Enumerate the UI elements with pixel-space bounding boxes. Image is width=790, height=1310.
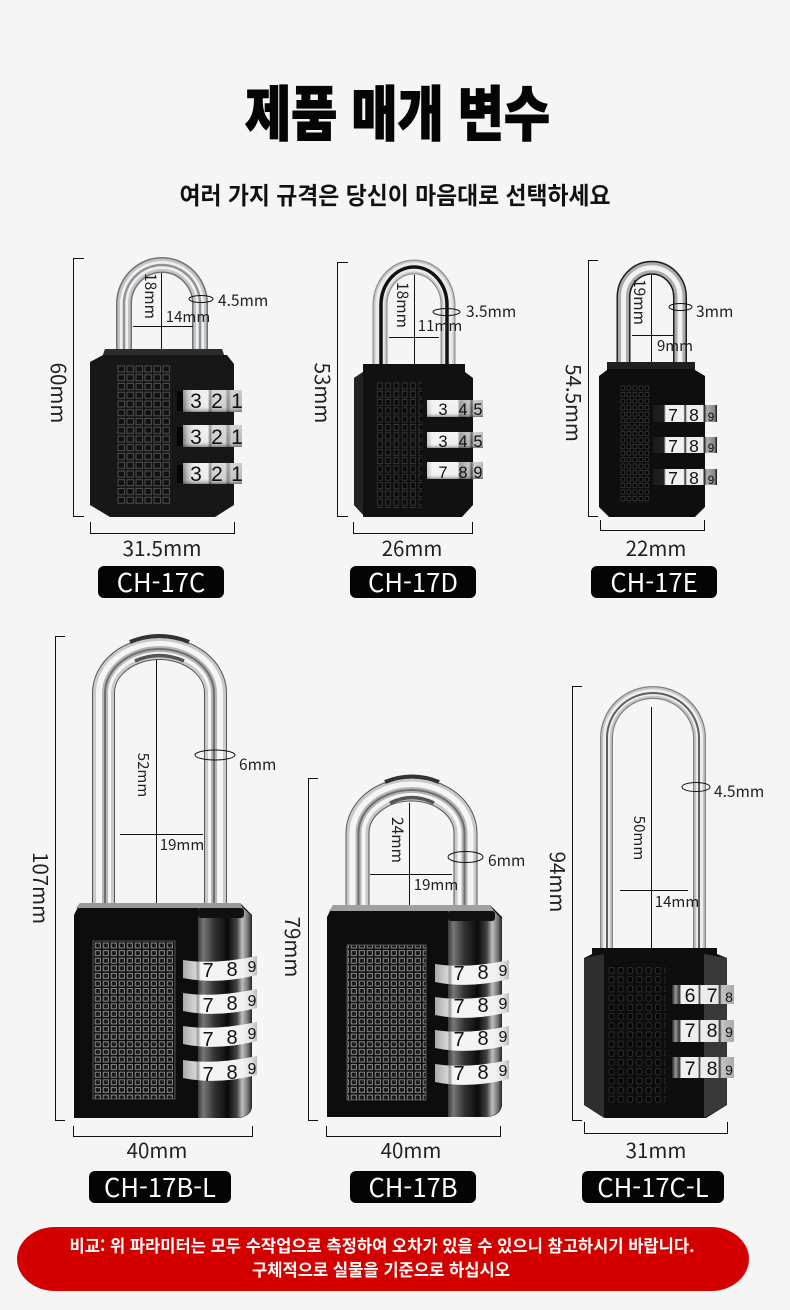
thickness label: 3mm [696, 300, 733, 322]
combination wheels: 9 [499, 1063, 508, 1080]
combination wheels: 3 [438, 433, 448, 451]
combination wheels: 8 [477, 1062, 489, 1084]
note line 2: 구체적으로 실물을 기준으로 하십시오 [252, 1256, 510, 1281]
combination wheels: 2 [211, 390, 223, 413]
height label: 53mm [309, 363, 339, 423]
inner width label: 19mm [160, 834, 204, 855]
subtitle: 여러 가지 규격은 당신이 마음대로 선택하세요 [180, 176, 610, 211]
combination wheels: 8 [707, 1020, 717, 1042]
height label: 94mm [544, 852, 574, 912]
thickness label: 6mm [239, 753, 276, 775]
combination wheels: 1 [231, 390, 243, 413]
combination wheels [435, 960, 509, 1085]
inner width label: 19mm [414, 874, 458, 895]
width label: 31mm [626, 1134, 686, 1164]
dimension lines [308, 778, 500, 1136]
combination wheels: 8 [707, 1058, 717, 1080]
inner height label: 19mm [629, 279, 651, 325]
model tag [591, 563, 717, 600]
combination wheels: 3 [190, 390, 202, 413]
width label: 40mm [381, 1134, 441, 1164]
shackle [624, 268, 680, 366]
inner width label: 9mm [657, 335, 693, 356]
combination wheels: 1 [231, 426, 243, 449]
combination wheels: 7 [668, 405, 678, 425]
thickness label: 4.5mm [218, 289, 268, 311]
inner height label: 18mm [140, 273, 162, 319]
padlock spec: CH-17C [45, 258, 268, 600]
padlock spec: CH-17D [309, 262, 516, 600]
combination wheels: 8 [725, 989, 733, 1005]
padlock spec: CH-17C-L [544, 686, 764, 1205]
model tag: CH-17C-L [597, 1168, 709, 1205]
combination wheels: 5 [473, 433, 483, 451]
combination wheels: 7 [668, 436, 678, 456]
combination wheels [177, 390, 243, 486]
width label: 31.5mm [123, 532, 201, 562]
dimension lines [338, 262, 472, 534]
combination wheels: 9 [248, 993, 257, 1010]
combination wheels [427, 400, 483, 482]
height label: 107mm [27, 852, 57, 924]
combination wheels: 8 [226, 1027, 238, 1049]
combination wheels: 8 [689, 436, 699, 456]
combination wheels: 9 [248, 959, 257, 976]
inner width label: 14mm [655, 891, 699, 912]
combination wheels: 7 [453, 963, 465, 985]
combination wheels [653, 405, 717, 488]
dimension lines [74, 258, 234, 534]
inner height label: 24mm [387, 817, 409, 863]
combination wheels: 8 [477, 962, 489, 984]
combination wheels: 7 [202, 1029, 214, 1051]
combination wheels: 4 [458, 401, 468, 419]
combination wheels: 9 [708, 473, 715, 487]
combination wheels: 8 [226, 959, 238, 981]
combination wheels: 9 [499, 963, 508, 980]
shackle [380, 267, 448, 368]
model tag: CH-17B-L [104, 1168, 216, 1205]
combination wheels [672, 985, 734, 1080]
combination wheels: 7 [685, 1058, 695, 1080]
combination wheels: 9 [248, 1061, 257, 1078]
padlock spec: CH-17B-L [27, 636, 276, 1205]
combination wheels: 7 [202, 960, 214, 982]
combination wheels: 8 [689, 405, 699, 425]
combination wheels: 8 [226, 993, 238, 1015]
banner background [17, 1227, 749, 1291]
shackle [606, 692, 700, 952]
height label: 60mm [45, 363, 75, 423]
thickness ring [448, 852, 483, 862]
combination wheels: 7 [668, 468, 678, 488]
width label: 22mm [626, 532, 686, 562]
thickness ring [195, 750, 235, 760]
thickness ring [189, 296, 213, 302]
note line 1: 비교: 위 파라미터는 모두 수작업으로 측정하여 오차가 있을 수 있으니 참고하시기 바랍니다. [70, 1232, 694, 1257]
padlock spec: CH-17B [279, 776, 525, 1205]
dimension lines [56, 636, 252, 1136]
thickness label: 6mm [488, 849, 525, 871]
combination wheels: 3 [190, 426, 202, 449]
combination wheels: 5 [473, 401, 483, 419]
combination wheels: 8 [477, 1028, 489, 1050]
combination wheels: 9 [473, 464, 483, 482]
model tag: CH-17E [610, 563, 698, 600]
width label: 40mm [127, 1134, 187, 1164]
shackle [124, 265, 200, 352]
combination wheels: 9 [725, 1024, 733, 1040]
combination wheels: 3 [438, 401, 448, 419]
combination wheels: 2 [211, 426, 223, 449]
combination wheels: 7 [707, 985, 717, 1007]
height label: 54.5mm [560, 364, 590, 442]
combination wheels: 1 [231, 463, 243, 486]
width label: 26mm [382, 532, 442, 562]
height label: 79mm [279, 917, 309, 977]
combination wheels: 8 [226, 1062, 238, 1084]
dimension lines [588, 260, 704, 530]
combination wheels: 7 [685, 1020, 695, 1042]
combination wheels: 7 [453, 1029, 465, 1051]
combination wheels: 9 [499, 996, 508, 1013]
thickness label: 4.5mm [714, 780, 764, 802]
combination wheels: 7 [202, 995, 214, 1017]
combination wheels: 4 [458, 433, 468, 451]
combination wheels: 8 [477, 995, 489, 1017]
inner height label: 52mm [133, 753, 154, 797]
inner height label: 18mm [392, 282, 414, 328]
combination wheels: 9 [499, 1029, 508, 1046]
inner width label: 11mm [418, 315, 462, 336]
combination wheels: 8 [689, 468, 699, 488]
thickness ring [669, 304, 692, 310]
model tag: CH-17D [368, 563, 458, 600]
combination wheels: 9 [248, 1026, 257, 1043]
dimension lines [572, 686, 728, 1134]
lock body [327, 905, 502, 1117]
combination wheels: 7 [438, 464, 448, 482]
thickness ring [433, 308, 460, 316]
shackle [358, 776, 466, 910]
combination wheels: 7 [453, 996, 465, 1018]
shackle [104, 636, 216, 908]
title: 제품 매개 변수 [245, 67, 550, 153]
combination wheels: 6 [685, 985, 695, 1007]
combination wheels: 9 [708, 441, 715, 455]
combination wheels: 3 [190, 463, 202, 486]
lock body [584, 948, 727, 1118]
thickness label: 3.5mm [466, 300, 516, 322]
lock body [74, 903, 252, 1118]
thickness ring [682, 782, 710, 792]
combination wheels [183, 956, 257, 1086]
note banner [17, 1227, 749, 1291]
combination wheels: 7 [453, 1063, 465, 1085]
combination wheels: 8 [458, 464, 468, 482]
inner height label: 50mm [629, 816, 650, 860]
model tag: CH-17C [117, 563, 205, 600]
combination wheels: 2 [211, 463, 223, 486]
inner width label: 14mm [166, 306, 210, 327]
combination wheels: 9 [725, 1062, 733, 1078]
combination wheels: 7 [202, 1064, 214, 1086]
combination wheels: 9 [708, 410, 715, 424]
lock body [354, 364, 473, 517]
model tag: CH-17B [368, 1168, 458, 1205]
padlock spec: CH-17E [560, 260, 733, 600]
lock body [90, 349, 234, 517]
lock body [599, 362, 705, 517]
